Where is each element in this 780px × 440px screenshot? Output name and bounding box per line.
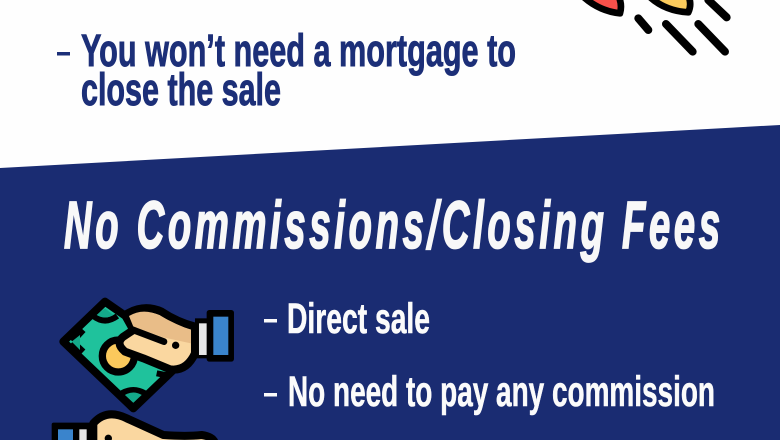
navy panel — [0, 125, 780, 440]
bullet: mortgage — [57, 25, 516, 115]
icon: lower hand — [52, 414, 215, 440]
bullet: mortgage: You won’t need a mortgage to — [81, 25, 516, 76]
bullets: direct sale and commission: Direct sale — [287, 295, 430, 343]
bullets: direct sale and commission — [264, 295, 715, 416]
bullet: mortgage: close the sale — [81, 64, 281, 115]
rocket flames icon — [577, 0, 727, 52]
icon: hand holding money — [63, 302, 234, 408]
title: No Commissions/Closing Fees — [64, 188, 720, 263]
